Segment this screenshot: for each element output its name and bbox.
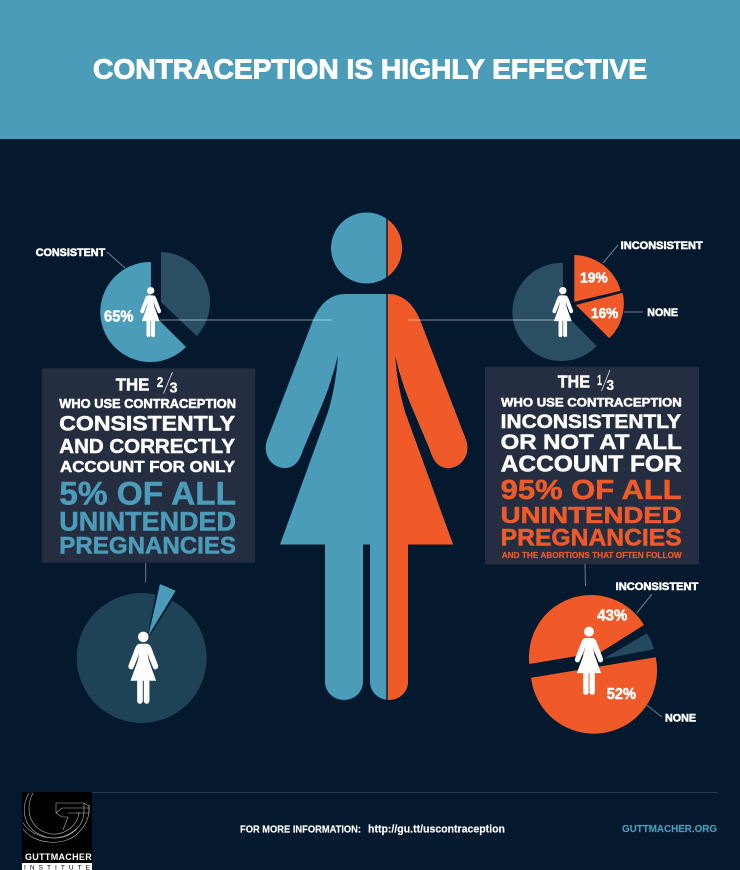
highlight text: UNINTENDED — [59, 506, 236, 536]
highlight text — [59, 475, 236, 560]
label: inconsistent lower — [616, 581, 699, 613]
label: none — [624, 307, 678, 319]
body text: INCONSISTENTLY — [501, 411, 681, 433]
heading: the 2/3: 2 — [157, 374, 163, 391]
body text: CONSISTENTLY — [59, 412, 235, 436]
body text: OR NOT AT ALL — [501, 431, 682, 454]
heading: the 1/3: 1 — [597, 372, 602, 389]
connector under right panel — [584, 564, 586, 586]
label: consistent: CONSISTENT — [36, 247, 106, 259]
icon: woman — [552, 287, 573, 337]
title: CONTRACEPTION IS HIGHLY EFFECTIVE — [93, 53, 647, 84]
body text: AND CORRECTLY — [59, 435, 235, 458]
connector line from figure to left pie — [160, 319, 332, 321]
label: inconsistent lower: INCONSISTENT — [616, 581, 699, 593]
logo: Guttmacher Institute: GUTTMACHER — [25, 852, 92, 862]
pie: 5% of unintended pregnancies — [77, 581, 207, 723]
label: 16%: 16% — [591, 305, 618, 322]
label: 65%: 65% — [104, 308, 134, 325]
heading: the 1/3: 3 — [606, 377, 614, 394]
heading: the 2/3 — [116, 372, 178, 396]
label: none lower — [647, 705, 696, 724]
body text — [59, 397, 236, 476]
body text: WHO USE CONTRACEPTION — [501, 395, 682, 409]
heading: the 2/3: 3 — [170, 380, 178, 396]
body text: ACCOUNT FOR — [501, 450, 682, 476]
central split figure — [266, 210, 467, 702]
icon: woman — [128, 632, 158, 704]
footer: more information — [240, 824, 505, 836]
label: 52%: 52% — [607, 686, 636, 703]
label: inconsistent — [603, 240, 703, 263]
heading: the 1/3 — [558, 370, 614, 394]
connector under left panel — [145, 563, 147, 582]
label: inconsistent: INCONSISTENT — [621, 240, 703, 252]
footer: more information: FOR MORE INFORMATION: — [240, 825, 361, 836]
highlight text: UNINTENDED — [501, 502, 682, 528]
highlight text: PREGNANCIES — [501, 526, 682, 552]
highlight text: PREGNANCIES — [59, 533, 236, 560]
icon: woman — [575, 627, 603, 695]
highlight text: AND THE ABORTIONS THAT OFTEN FOLLOW — [502, 550, 682, 560]
connector line from figure to right pie — [408, 319, 562, 321]
body text: WHO USE CONTRACEPTION — [59, 397, 236, 411]
highlight text: 5% OF ALL — [59, 475, 236, 512]
footer: more information: http://gu.tt/uscontraception — [368, 824, 505, 836]
panel: the two-thirds — [42, 368, 255, 563]
footer: website: GUTTMACHER.ORG — [622, 823, 717, 835]
heading: the 2/3: THE — [116, 374, 149, 394]
label: none: NONE — [647, 307, 678, 319]
label: none lower: NONE — [665, 712, 696, 724]
footer rule — [22, 792, 718, 794]
body text — [501, 395, 682, 476]
label: 43%: 43% — [597, 608, 628, 625]
highlight text — [501, 474, 682, 560]
pie: 95% of unintended pregnancies — [529, 595, 657, 734]
heading: the 1/3: THE — [558, 371, 590, 391]
header band — [0, 0, 740, 139]
icon: woman — [140, 287, 161, 337]
logo: Guttmacher Institute — [22, 792, 92, 870]
body text: ACCOUNT FOR ONLY — [60, 459, 235, 476]
pie: consistent users — [100, 252, 210, 362]
label: 19%: 19% — [580, 270, 608, 287]
panel: the one-third — [485, 367, 699, 564]
label: consistent — [36, 247, 125, 268]
pie: inconsistent or no use — [512, 255, 624, 361]
highlight text: 95% OF ALL — [501, 474, 682, 505]
